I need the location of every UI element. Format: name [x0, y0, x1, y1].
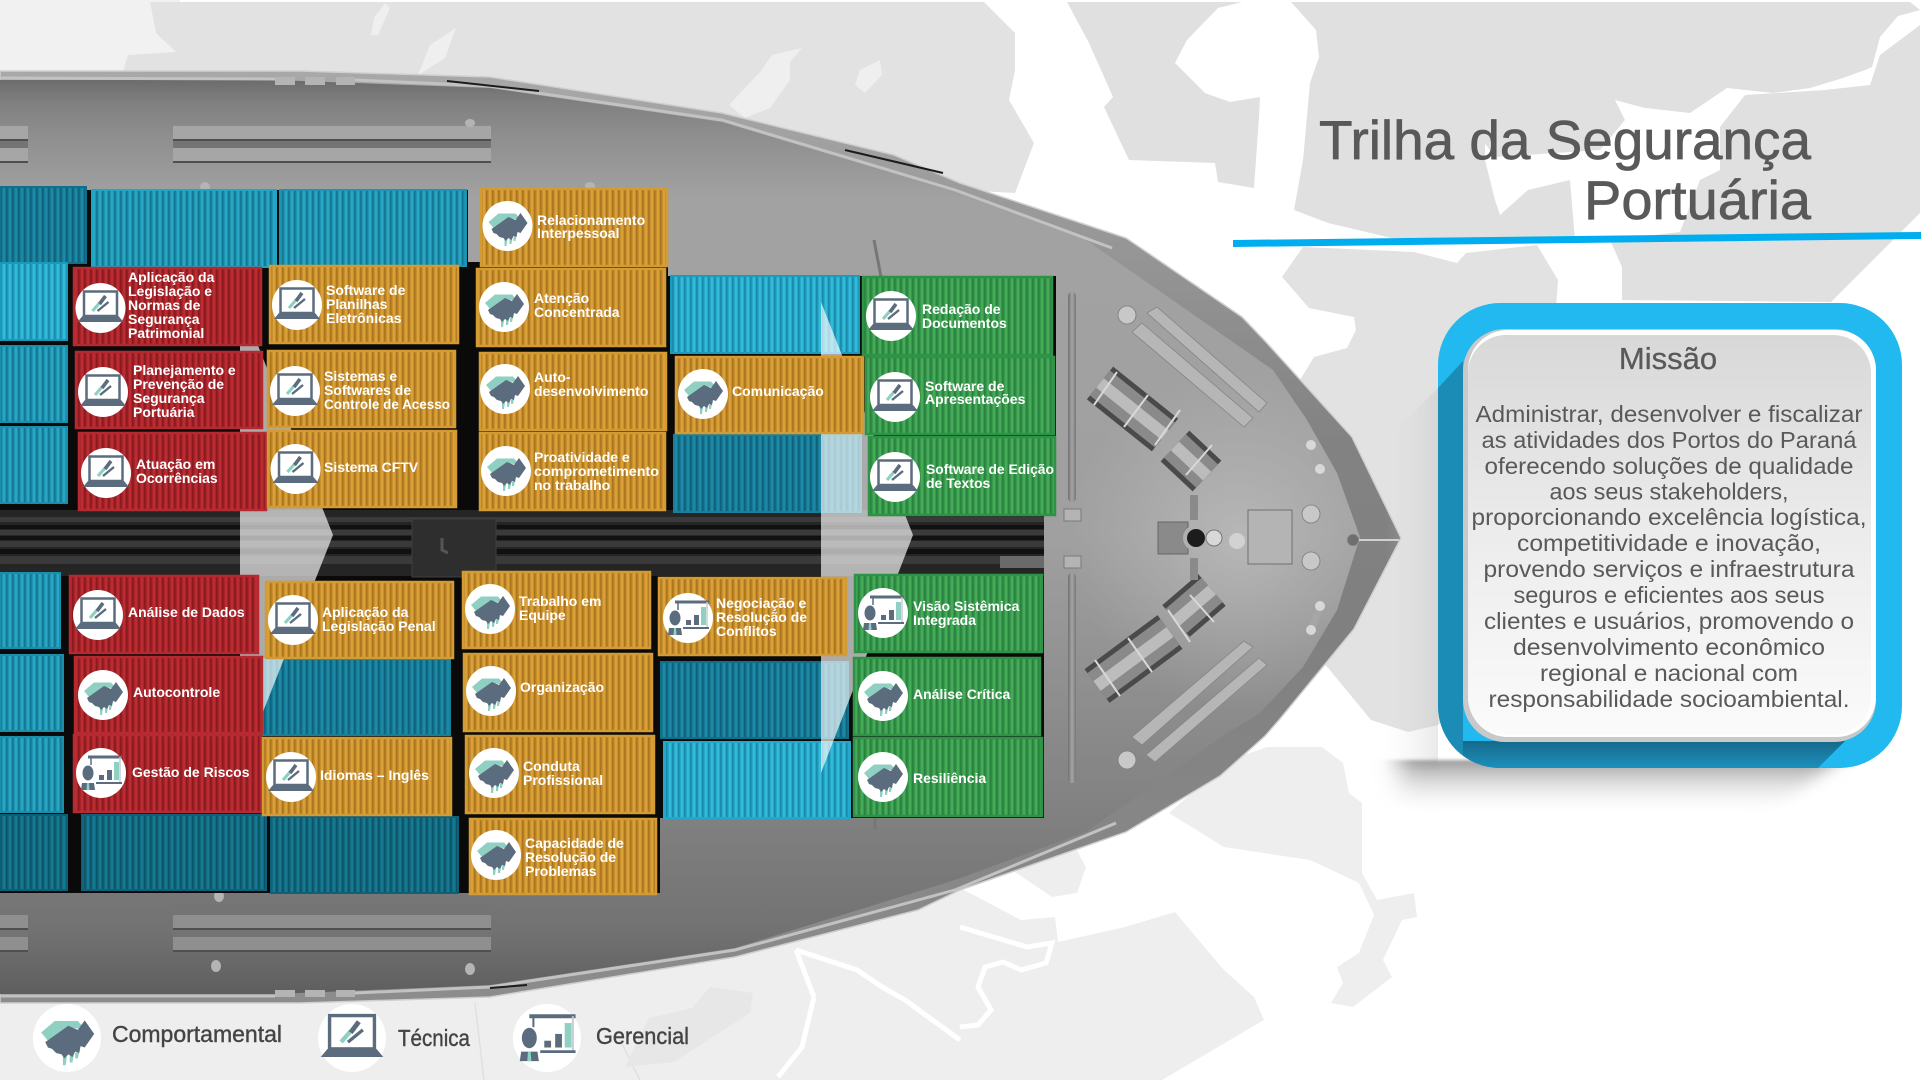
- text block: mission statement: clientes e usuários, promovendo o: [1484, 608, 1854, 634]
- container: Redação de Documentos: Redação de: [922, 301, 1001, 317]
- container: Resiliência: Resiliência: [913, 770, 986, 786]
- container: Software de Edição de Textos: de Textos: [926, 475, 991, 491]
- legend item: Gerencial: Gerencial: [596, 1023, 689, 1049]
- container: Atuação em Ocorrências: Atuação em: [136, 456, 215, 472]
- container: Software de Planilhas Eletrônicas: Eletrônicas: [326, 310, 402, 326]
- container: Sistemas e Softwares de Controle de Acesso: Sistemas e: [324, 368, 397, 384]
- container: Atenção Concentrada: Atenção: [534, 290, 589, 306]
- title: Trilha da Segurança: [1319, 109, 1811, 171]
- container: Comunicação: [676, 357, 863, 433]
- container: Capacidade de Resolução de Problemas: [470, 819, 656, 894]
- container: Gestão de Riscos: Gestão de Riscos: [132, 764, 250, 780]
- container: Conduta Profissional: Profissional: [523, 772, 603, 788]
- panel: green containers: [854, 277, 1055, 816]
- container: Sistema CFTV: Sistema CFTV: [324, 459, 419, 475]
- legend item: Técnica: [318, 1004, 470, 1072]
- dark stack base and central walkway: [0, 190, 1056, 893]
- container: Análise Crítica: [854, 658, 1040, 735]
- container: Software de Apresentações: Apresentações: [925, 391, 1026, 407]
- container: Trabalho em Equipe: Equipe: [519, 607, 566, 623]
- container: Planejamento e Prevenção: Prevenção de: [133, 376, 224, 392]
- container: Trabalho em Equipe: [463, 572, 650, 648]
- container: Conduta Profissional: [466, 736, 654, 813]
- container: Atenção Concentrada: [477, 269, 665, 346]
- container: Capacidade de Resolução de Problemas: Resolução de: [525, 849, 616, 865]
- text block: mission statement: desenvolvimento econômico: [1513, 634, 1825, 660]
- text block: mission statement: oferecendo soluções de qualidade: [1484, 453, 1854, 479]
- container: Análise de Dados: Análise de Dados: [128, 604, 245, 620]
- container: Conduta Profissional: Conduta: [523, 758, 580, 774]
- container: Negociação e Resolução de Conflitos: Conflitos: [716, 623, 777, 639]
- container: Software de Edição de Textos: Software de Edição: [926, 461, 1054, 477]
- deck fittings: bars, bollards and ovals: [0, 77, 595, 997]
- text block: mission statement: competitividade e inovação,: [1517, 530, 1821, 556]
- title underline: [1233, 232, 1921, 247]
- container: Negociação e Resolução de Conflitos: [659, 578, 846, 655]
- container: Proatividade e comprometimento: no trabalho: [534, 477, 610, 493]
- container: Resiliência: [854, 738, 1042, 816]
- title: [1319, 109, 1811, 231]
- container: Proatividade e comprometimento: Proatividade e: [534, 449, 630, 465]
- container: Sistemas e Softwares de Controle de Acesso: Controle de Acesso: [324, 396, 450, 412]
- container: Aplicação da Legislação Penal: Legislação Penal: [322, 618, 436, 634]
- container: Aplicação da Legislação e Normas: Segurança: [128, 311, 200, 327]
- legend item: Gerencial: [513, 1004, 689, 1072]
- legend item: Comportamental: [33, 1004, 282, 1072]
- container: Planejamento e Prevenção: Planejamento e: [133, 362, 236, 378]
- container: Sistemas e Softwares de Controle de Acesso: [268, 351, 455, 427]
- container: Organização: Organização: [520, 679, 604, 695]
- container: Aplicação da Legislação e Normas: Legislação e: [128, 283, 212, 299]
- text block: mission statement: regional e nacional com: [1540, 660, 1798, 686]
- teal background containers: [0, 187, 861, 893]
- container: Auto-desenvolvimento: desenvolvimento: [534, 383, 648, 399]
- container: Aplicação da Legislação e Normas: Normas de: [128, 297, 201, 313]
- heading: Missão: Missão: [1619, 341, 1717, 376]
- container: Aplicação da Legislação e Normas: Aplicação da: [128, 269, 215, 285]
- container: Autocontrole: [75, 657, 262, 733]
- panel: mission card: [1385, 303, 1902, 816]
- text block: mission statement: provendo serviços e infraestrutura: [1484, 556, 1855, 582]
- container: Negociação e Resolução de Conflitos: Resolução de: [716, 609, 807, 625]
- container: Atenção Concentrada: Concentrada: [534, 304, 620, 320]
- container: Autocontrole: Autocontrole: [133, 684, 220, 700]
- container: Comunicação: Comunicação: [732, 383, 824, 399]
- text block: mission statement: [1472, 401, 1866, 712]
- text block: mission statement: as atividades dos Portos do Paraná: [1482, 427, 1857, 453]
- container: Atuação em Ocorrências: Ocorrências: [136, 470, 218, 486]
- container: Relacionamento Interpessoal: Relacionamento: [537, 212, 645, 228]
- container: Sistemas e Softwares de Controle de Acesso: Softwares de: [324, 382, 411, 398]
- container: Visão Sistêmica Integrada: [855, 575, 1042, 652]
- arrow: left translucent direction arrow: [240, 300, 333, 770]
- container: Idiomas – Inglês: [263, 738, 451, 815]
- container: Auto-desenvolvimento: [480, 353, 666, 430]
- container: Relacionamento Interpessoal: Interpessoal: [537, 225, 619, 241]
- container: Proatividade e comprometimento: comprometimento: [534, 463, 659, 479]
- container: Software de Planilhas Eletrônicas: Planilhas: [326, 296, 388, 312]
- container: Planejamento e Prevenção: Segurança: [133, 390, 205, 406]
- container: Planejamento e Prevenção: Portuária: [133, 404, 195, 420]
- container: Sistema CFTV: [268, 431, 456, 507]
- container: Aplicação da Legislação Penal: Aplicação da: [322, 604, 409, 620]
- container: Software de Planilhas Eletrônicas: [270, 266, 458, 343]
- container: Análise Crítica: Análise Crítica: [913, 686, 1010, 702]
- container: Capacidade de Resolução de Problemas: Problemas: [525, 863, 597, 879]
- legend: [33, 1004, 689, 1072]
- container: Proatividade e comprometimento: [480, 433, 665, 510]
- container: Capacidade de Resolução de Problemas: Capacidade de: [525, 835, 624, 851]
- text block: mission statement: Administrar, desenvolver e fiscalizar: [1476, 401, 1863, 427]
- container: Análise de Dados: [70, 576, 258, 653]
- container: Negociação e Resolução de Conflitos: Negociação e: [716, 595, 806, 611]
- container: Redação de Documentos: [863, 277, 1052, 355]
- container: Atuação em Ocorrências: [79, 433, 266, 510]
- container: Software de Planilhas Eletrônicas: Software de: [326, 282, 406, 298]
- container: Aplicação da Legislação e Normas: Patrimonial: [128, 325, 204, 341]
- ship hull: [0, 71, 1401, 1003]
- container: Idiomas – Inglês: Idiomas – Inglês: [320, 767, 429, 783]
- container: Visão Sistêmica Integrada: Integrada: [913, 612, 976, 628]
- container: Visão Sistêmica Integrada: Visão Sistêmica: [913, 598, 1020, 614]
- container: Redação de Documentos: Documentos: [922, 315, 1007, 331]
- container: Gestão de Riscos: [74, 735, 261, 812]
- container: Aplicação da Legislação e Normas: [74, 268, 261, 345]
- container: Auto-desenvolvimento: Auto-: [534, 369, 571, 385]
- legend item: Técnica: Técnica: [398, 1025, 470, 1051]
- panel: gold containers: [263, 189, 863, 894]
- container: Relacionamento Interpessoal: [481, 189, 667, 266]
- legend item: Comportamental: Comportamental: [112, 1021, 282, 1047]
- text block: mission statement: responsabilidade socioambiental.: [1488, 686, 1850, 712]
- container: Aplicação da Legislação Penal: [266, 582, 453, 658]
- panel: red containers: [70, 268, 266, 812]
- container: Software de Apresentações: [866, 357, 1054, 434]
- container: Software de Apresentações: Software de: [925, 378, 1005, 394]
- container: Trabalho em Equipe: Trabalho em: [519, 593, 601, 609]
- text block: mission statement: seguros e eficientes aos seus: [1514, 582, 1824, 608]
- container: Planejamento e Prevenção: [76, 352, 262, 428]
- container: Organização: [464, 654, 652, 731]
- bow equipment: winches, planks, pipes: [874, 240, 1399, 830]
- text block: mission statement: proporcionando excelência logística,: [1472, 504, 1866, 530]
- title: Portuária: [1584, 169, 1811, 231]
- arrow: right translucent direction arrow: [821, 302, 913, 773]
- container: Software de Edição de Textos: [869, 437, 1055, 515]
- text block: mission statement: aos seus stakeholders,: [1550, 478, 1788, 504]
